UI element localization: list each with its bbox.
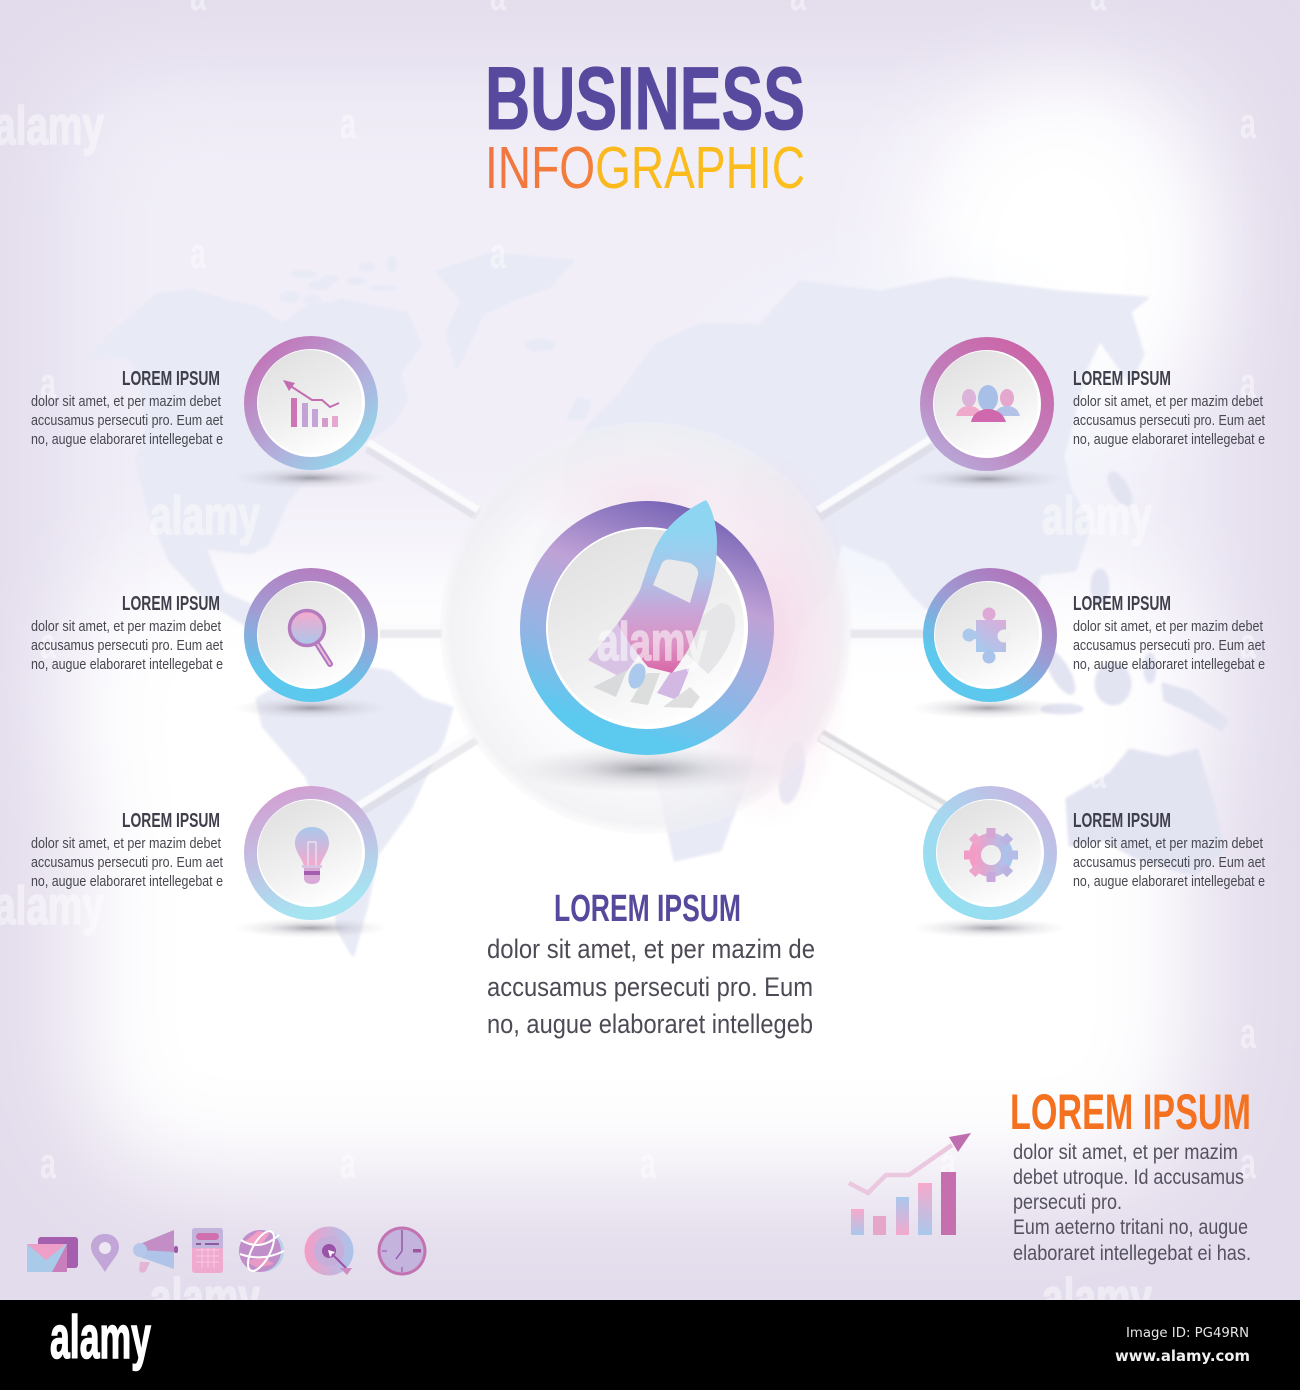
text: right middle: accusamus persecuti pro. Eum aet xyxy=(1073,638,1265,654)
watermark over rocket: alamy xyxy=(597,612,707,672)
connector lines xyxy=(358,438,945,812)
text: right top xyxy=(1073,368,1265,448)
watermarks: a xyxy=(40,359,56,408)
text: lower right block: elaboraret intellegebat ei has. xyxy=(1013,1242,1251,1265)
text: right middle: LOREM IPSUM xyxy=(1073,593,1171,615)
text: right bottom: dolor sit amet, et per mazim debet xyxy=(1073,836,1263,852)
text: left bottom xyxy=(31,810,223,890)
text: right top: accusamus persecuti pro. Eum aet xyxy=(1073,413,1265,429)
text: right top: no, augue elaboraret intellegebat e xyxy=(1073,432,1265,448)
continent: africa xyxy=(535,478,840,860)
text: left top: no, augue elaboraret intellegebat e xyxy=(31,432,223,448)
node: team xyxy=(909,337,1065,490)
text: centre block: dolor sit amet, et per mazim de xyxy=(487,934,815,964)
text: left top xyxy=(31,368,223,448)
icon: people xyxy=(956,385,1020,422)
node: search xyxy=(233,568,389,719)
world map xyxy=(90,254,1227,955)
icon: globe xyxy=(239,1227,284,1275)
icon: gear xyxy=(964,828,1018,882)
text: centre block: no, augue elaboraret intellegeb xyxy=(487,1009,813,1039)
node: puzzle xyxy=(910,568,1066,719)
footer bar xyxy=(0,1300,1300,1390)
watermarks: a xyxy=(190,749,206,798)
text: right middle xyxy=(1073,593,1265,673)
icon: map pin xyxy=(91,1234,119,1272)
icon row xyxy=(27,1226,426,1276)
watermark: bottom row xyxy=(150,1268,1152,1328)
watermarks: a xyxy=(940,1139,956,1188)
text: left bottom: dolor sit amet, et per mazim debet xyxy=(31,836,221,852)
watermarks: a xyxy=(340,99,356,148)
node: chart down xyxy=(233,336,389,489)
continent: north america xyxy=(90,290,420,635)
watermarks: a xyxy=(190,229,206,278)
watermarks: a xyxy=(640,1139,656,1188)
watermarks: a xyxy=(1240,1139,1256,1188)
text: left middle xyxy=(31,593,223,673)
text: left top: accusamus persecuti pro. Eum aet xyxy=(31,413,223,429)
title xyxy=(485,48,805,201)
text: centre block xyxy=(487,888,815,1039)
text: right top: dolor sit amet, et per mazim debet xyxy=(1073,394,1263,410)
watermarks: alamy xyxy=(150,486,260,546)
text: left bottom: no, augue elaboraret intellegebat e xyxy=(31,874,223,890)
icon: megaphone xyxy=(133,1230,178,1273)
icon: puzzle piece xyxy=(962,608,1010,664)
uk xyxy=(568,398,590,418)
continent: eurasia xyxy=(565,278,1147,668)
watermarks: a xyxy=(40,619,56,668)
node: bulb xyxy=(233,786,389,938)
text: right top: LOREM IPSUM xyxy=(1073,368,1171,390)
icon: rocket xyxy=(588,500,735,708)
text: lower right block: dolor sit amet, et per mazim xyxy=(1013,1141,1238,1164)
watermarks: a xyxy=(1240,1009,1256,1058)
translucent outer circle xyxy=(440,422,852,834)
watermark: bottom row: alamy xyxy=(1042,1268,1152,1328)
title: BUSINESS xyxy=(485,48,805,148)
icon: envelope xyxy=(27,1237,78,1272)
text: left bottom: LOREM IPSUM xyxy=(122,810,220,832)
node: gear xyxy=(912,786,1068,938)
footer image id: Image ID: PG49RN xyxy=(1126,1325,1249,1341)
text: right middle: dolor sit amet, et per mazim debet xyxy=(1073,619,1263,635)
watermark: bottom row: alamy xyxy=(150,1268,260,1328)
southeast asia islands xyxy=(1041,470,1227,730)
icon: falling bars xyxy=(283,380,339,427)
text: left middle: no, augue elaboraret intellegebat e xyxy=(31,657,223,673)
continent: australia xyxy=(1067,750,1224,875)
text: centre block: LOREM IPSUM xyxy=(554,888,741,930)
watermarks: a xyxy=(1240,99,1256,148)
arctic islands xyxy=(280,255,397,305)
text: left middle: dolor sit amet, et per mazim debet xyxy=(31,619,221,635)
text: left top: LOREM IPSUM xyxy=(122,368,220,390)
icon: clock xyxy=(378,1226,426,1276)
text: lower right block: persecuti pro. xyxy=(1013,1191,1122,1214)
text: lower right block: Eum aeterno tritani no, augue xyxy=(1013,1216,1248,1239)
continent: south america xyxy=(257,664,452,955)
watermarks: a xyxy=(490,229,506,278)
hub shadow xyxy=(510,745,780,793)
icon: light bulb xyxy=(295,827,329,884)
watermarks: alamy xyxy=(1042,486,1152,546)
text: right bottom: accusamus persecuti pro. Eum aet xyxy=(1073,855,1265,871)
text: right bottom: no, augue elaboraret intellegebat e xyxy=(1073,874,1265,890)
text: left bottom: accusamus persecuti pro. Eum aet xyxy=(31,855,223,871)
central hub xyxy=(440,422,855,834)
text: right bottom xyxy=(1073,810,1265,890)
text: left middle: accusamus persecuti pro. Eum aet xyxy=(31,638,223,654)
footer url: www.alamy.com xyxy=(1115,1347,1250,1365)
continent: greenland xyxy=(437,254,573,368)
text: left middle: LOREM IPSUM xyxy=(122,593,220,615)
watermarks: a xyxy=(1240,359,1256,408)
text: right bottom: LOREM IPSUM xyxy=(1073,810,1171,832)
watermarks: a xyxy=(340,1139,356,1188)
text: lower right block xyxy=(1010,1084,1251,1265)
icon: magnifier xyxy=(290,610,330,664)
text: right middle: no, augue elaboraret intellegebat e xyxy=(1073,657,1265,673)
footer logo: alamy xyxy=(50,1304,151,1371)
text: centre block: accusamus persecuti pro. Eum xyxy=(487,972,813,1002)
watermarks: a xyxy=(1240,619,1256,668)
icon: calculator xyxy=(192,1228,223,1273)
gradient ring xyxy=(520,501,774,755)
title: INFOGRAPHIC xyxy=(485,135,805,201)
watermarks: a xyxy=(40,1139,56,1188)
text: left top: dolor sit amet, et per mazim debet xyxy=(31,394,221,410)
icon: target xyxy=(304,1226,354,1276)
icon: growth chart xyxy=(849,1133,971,1235)
text: lower right block: debet utroque. Id accusamus xyxy=(1013,1166,1244,1189)
watermarks: a xyxy=(1090,749,1106,798)
